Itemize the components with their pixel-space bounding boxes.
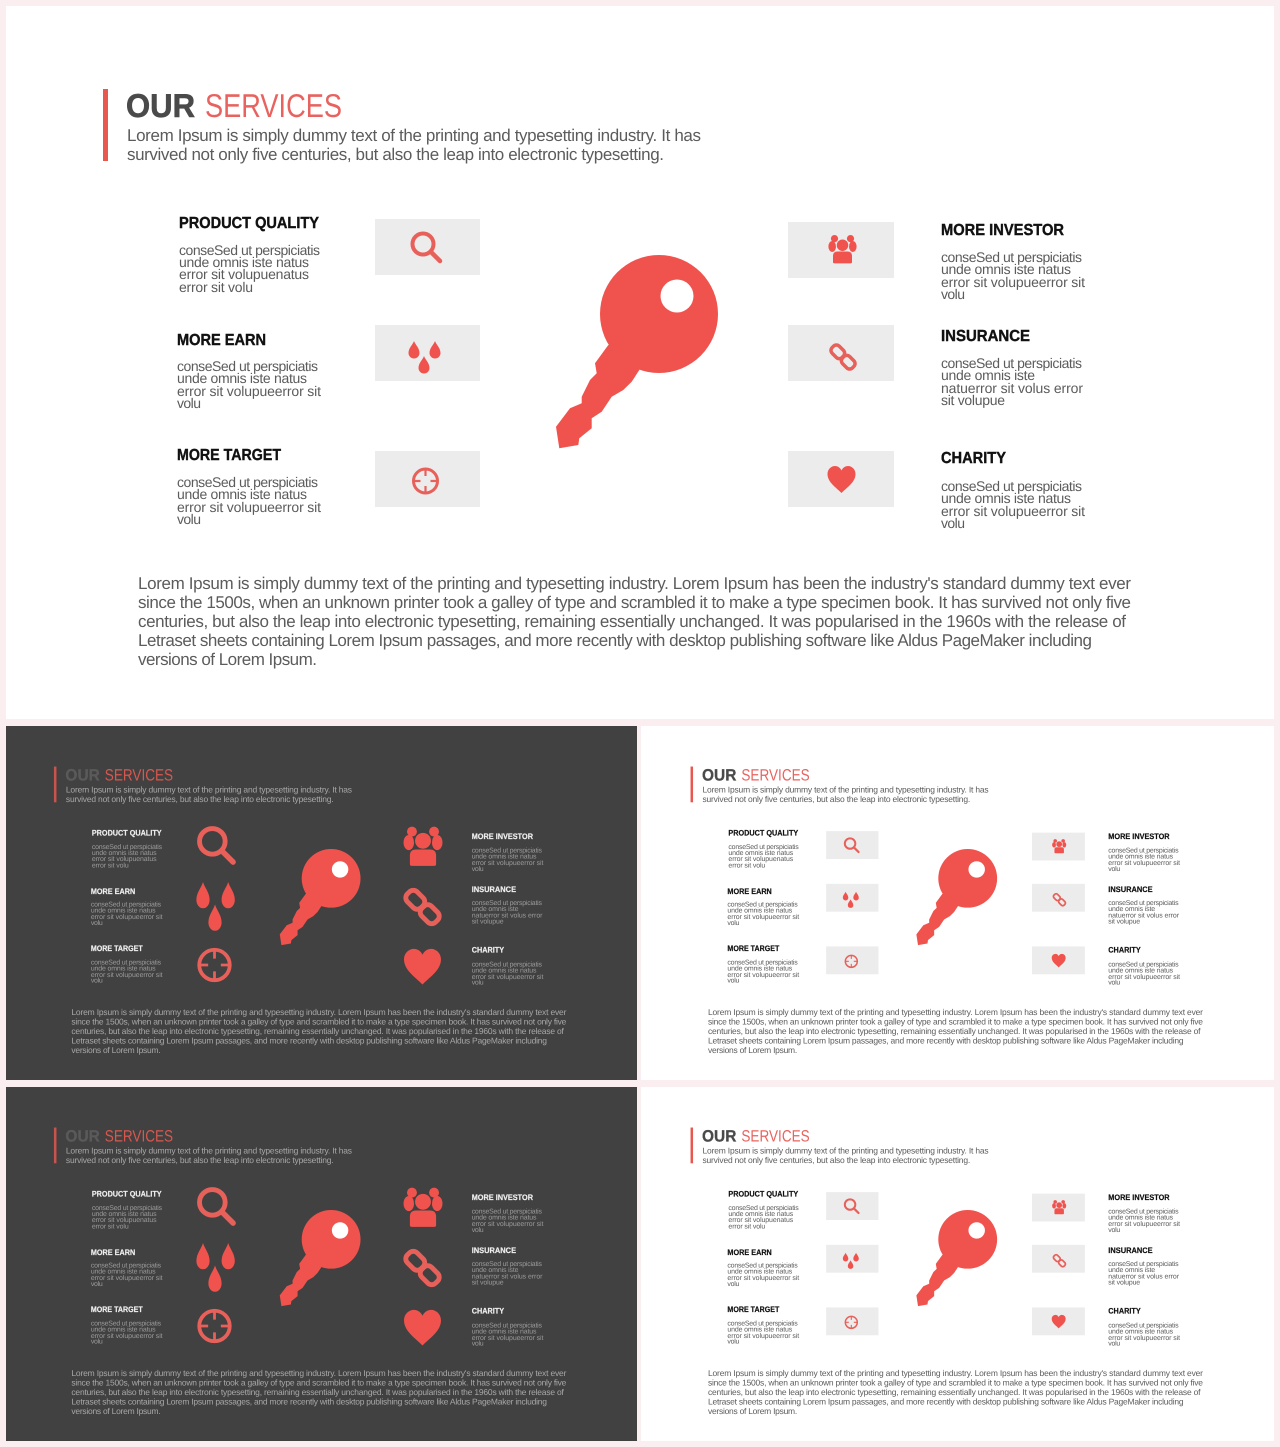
dark slide content: SERVICES (105, 766, 173, 784)
white slide content: unde omnis iste natus (727, 1325, 792, 1333)
dark slide content: Letraset sheets containing Lorem Ipsum passages, and more recently with desktop publishing software like Aldus PageMaker including (71, 1397, 547, 1406)
white slide content: SERVICES (741, 1127, 810, 1145)
white slide content: error sit volu (728, 1222, 765, 1230)
service: insurance: conseSed ut perspiciatis (941, 355, 1082, 371)
icon: people large (404, 1188, 442, 1227)
white slide content: volu (1108, 864, 1120, 872)
white slide content: conseSed ut perspiciatis (1108, 1207, 1179, 1215)
white slide content: since the 1500s, when an unknown printer took a galley of type and scrambled it to make a type specimen book. It has survived not only five (708, 1378, 1203, 1387)
icon: heart large (404, 1310, 441, 1345)
dark slide content: volu (91, 1337, 103, 1345)
dark slide content: survived not only five centuries, but also the leap into electronic typesetting. (66, 1155, 334, 1165)
icon box: target (375, 451, 480, 507)
dark slide content: MORE EARN (91, 1248, 135, 1257)
panel: dark slide bottom (6, 1087, 637, 1441)
white slide content: Lorem Ipsum is simply dummy text of the printing and typesetting industry. Lorem Ipsum has been the industry's standard dummy text ever (708, 1369, 1203, 1378)
subtitle: survived not only five centuries, but also the leap into electronic typesetting. (127, 145, 664, 164)
white slide content: MORE TARGET (727, 944, 779, 953)
white slide content: unde omnis iste natus (1108, 966, 1173, 974)
dark slide content: volu (472, 1339, 484, 1347)
service: product quality: error sit volupuenatus (179, 266, 309, 282)
white slide content: PRODUCT QUALITY (728, 1190, 798, 1199)
white slide content: since the 1500s, when an unknown printer took a galley of type and scrambled it to make a type specimen book. It has survived not only five (708, 1017, 1203, 1026)
white slide content: unde omnis iste (1108, 1266, 1155, 1274)
dark slide content: unde omnis iste natus (472, 852, 536, 860)
icon: heart large (404, 949, 441, 984)
service: product quality: error sit volu (179, 279, 253, 295)
icon box: magnifier (375, 219, 480, 275)
white slide content: versions of Lorem Ipsum. (708, 1045, 797, 1055)
white slide content: error sit volupueerror sit (1108, 1219, 1180, 1227)
icon: magnifier large (200, 1190, 233, 1223)
white slide content: volu (1108, 1339, 1120, 1347)
service: more target: conseSed ut perspiciatis (177, 474, 318, 490)
service: more target: unde omnis iste natus (177, 486, 307, 502)
white slide content: Letraset sheets containing Lorem Ipsum passages, and more recently with desktop publishing software like Aldus PageMaker including (708, 1036, 1184, 1045)
service: product quality: conseSed ut perspiciatis (179, 242, 320, 258)
dark slide content: unde omnis iste natus (91, 1325, 156, 1333)
white slide content: conseSed ut perspiciatis (727, 1319, 798, 1327)
service: more target: MORE TARGET (177, 447, 281, 464)
dark slide content: error sit volupueerror sit (472, 972, 544, 980)
dark slide content: sit volupue (472, 1278, 504, 1286)
accent bar (103, 89, 108, 161)
dark slide content: SERVICES (105, 1127, 173, 1145)
dark slide content: volu (472, 1225, 484, 1233)
title: SERVICES (205, 87, 342, 124)
service: more investor (941, 222, 1085, 302)
dark slide content: error sit volupueerror sit (91, 970, 163, 978)
icon: target large (199, 950, 230, 980)
dark slide content: MORE INVESTOR (472, 1194, 533, 1202)
icon: key (556, 255, 718, 448)
dark slide content: conseSed ut perspiciatis (91, 1261, 161, 1269)
service: insurance: INSURANCE (941, 328, 1030, 345)
white slide content (691, 766, 1203, 1055)
dark slide content: PRODUCT QUALITY (92, 1190, 162, 1199)
white slide content: unde omnis iste natus (1108, 852, 1173, 860)
white slide content: CHARITY (1108, 946, 1141, 954)
white slide content: MORE INVESTOR (1108, 1194, 1170, 1202)
dark slide content: conseSed ut perspiciatis (472, 1321, 542, 1329)
white slide content: volu (727, 1280, 739, 1288)
white slide content: volu (727, 919, 739, 927)
icon: target large (199, 1311, 230, 1341)
subtitle: Lorem Ipsum is simply dummy text of the printing and typesetting industry. It has (127, 126, 701, 145)
dark slide content: unde omnis iste natus (91, 964, 156, 972)
white slide content: Lorem Ipsum is simply dummy text of the printing and typesetting industry. Lorem Ipsum has been the industry's standard dummy text ever (708, 1008, 1203, 1017)
paragraph: since the 1500s, when an unknown printer took a galley of type and scrambled it to make a type specimen book. It has survived not only five (138, 593, 1131, 612)
service: more earn (177, 332, 321, 411)
white slide content: error sit volupuenatus (728, 1216, 793, 1223)
white slide content: conseSed ut perspiciatis (1108, 1321, 1179, 1329)
white slide content: OUR (702, 766, 736, 784)
white slide content: volu (727, 1337, 739, 1345)
dark slide content: MORE INVESTOR (472, 833, 533, 841)
service: insurance: unde omnis iste (941, 367, 1035, 383)
icon: chain large (403, 1249, 442, 1287)
dark slide content: unde omnis iste (472, 1266, 519, 1274)
white slide content: unde omnis iste natus (728, 849, 793, 856)
dark slide content: conseSed ut perspiciatis (91, 1319, 161, 1327)
icon: drops large (196, 882, 235, 931)
dark slide content: Lorem Ipsum is simply dummy text of the printing and typesetting industry. Lorem Ipsum has been the industry's standard dummy text ever (71, 1369, 567, 1378)
dark slide content: conseSed ut perspiciatis (472, 1207, 542, 1215)
dark slide content: sit volupue (472, 917, 504, 925)
dark slide content: centuries, but also the leap into electronic typesetting, remaining essentially unchanged. It was popularised in the 1960s with the release of (71, 1026, 564, 1036)
white slide content: INSURANCE (1108, 885, 1153, 894)
white slide content: conseSed ut perspiciatis (727, 1261, 798, 1269)
dark slide content: error sit volupueerror sit (472, 1333, 544, 1341)
dark slide content: Lorem Ipsum is simply dummy text of the printing and typesetting industry. It has (66, 785, 352, 794)
paragraph: versions of Lorem Ipsum. (138, 650, 317, 669)
dark slide content: centuries, but also the leap into electronic typesetting, remaining essentially unchanged. It was popularised in the 1960s with the release of (71, 1387, 564, 1397)
white slide content: volu (1108, 1225, 1120, 1233)
white slide content: survived not only five centuries, but also the leap into electronic typesetting. (703, 794, 970, 804)
service: charity (941, 450, 1085, 531)
white slide content: centuries, but also the leap into electronic typesetting, remaining essentially unchanged. It was popularised in the 1960s with the release of (708, 1387, 1201, 1397)
dark slide content: conseSed ut perspiciatis (472, 846, 542, 854)
white slide content: conseSed ut perspiciatis (728, 1204, 799, 1212)
service: insurance (941, 328, 1083, 408)
white slide content: Lorem Ipsum is simply dummy text of the printing and typesetting industry. It has (703, 785, 989, 794)
dark slide content: survived not only five centuries, but also the leap into electronic typesetting. (66, 794, 334, 804)
dark slide content: volu (91, 919, 103, 927)
dark slide content: since the 1500s, when an unknown printer took a galley of type and scrambled it to make a type specimen book. It has survived not only five (71, 1017, 566, 1026)
dark slide content: INSURANCE (472, 1246, 516, 1255)
white slide content: volu (1108, 978, 1120, 986)
white slide content: unde omnis iste natus (1108, 1327, 1173, 1335)
paragraph (138, 574, 1131, 669)
paragraph: Letraset sheets containing Lorem Ipsum passages, and more recently with desktop publishing software like Aldus PageMaker including (138, 631, 1092, 650)
dark slide content: natuerror sit volus error (472, 1272, 543, 1280)
dark slide content: error sit volu (92, 1222, 129, 1230)
paragraph: centuries, but also the leap into electronic typesetting, remaining essentially unchanged. It was popularised in the 1960s with the release of (138, 612, 1126, 631)
white slide content: unde omnis iste natus (727, 964, 792, 972)
dark slide content: error sit volupuenatus (92, 855, 157, 862)
service: charity: error sit volupueerror sit (941, 503, 1085, 519)
white slide content: versions of Lorem Ipsum. (708, 1406, 797, 1416)
dark slide content: natuerror sit volus error (472, 911, 543, 919)
dark slide content: MORE TARGET (91, 944, 143, 953)
service: more target: volu (177, 511, 201, 527)
white slide content: sit volupue (1108, 1278, 1140, 1286)
dark slide content: error sit volu (92, 861, 129, 869)
dark slide content: Letraset sheets containing Lorem Ipsum passages, and more recently with desktop publishing software like Aldus PageMaker including (71, 1036, 547, 1045)
service: charity: unde omnis iste natus (941, 490, 1071, 506)
dark slide content: OUR (65, 766, 100, 784)
white slide content: MORE INVESTOR (1108, 833, 1170, 841)
dark slide content: unde omnis iste natus (472, 1327, 536, 1335)
dark slide content: volu (91, 976, 103, 984)
white slide content: error sit volupueerror sit (1108, 858, 1180, 866)
dark slide content: conseSed ut perspiciatis (91, 958, 161, 966)
icon: drops large (196, 1243, 235, 1292)
dark slide content: error sit volupueerror sit (472, 858, 544, 866)
service: more earn: unde omnis iste natus (177, 370, 307, 386)
service: product quality: PRODUCT QUALITY (179, 215, 319, 232)
dark slide content: volu (472, 978, 484, 986)
white slide content: error sit volupuenatus (728, 855, 793, 862)
dark slide content (54, 1127, 567, 1416)
white slide content: Lorem Ipsum is simply dummy text of the printing and typesetting industry. It has (703, 1146, 989, 1155)
dark slide content: versions of Lorem Ipsum. (71, 1406, 161, 1416)
white slide content: sit volupue (1108, 917, 1140, 925)
service: more investor: MORE INVESTOR (941, 222, 1064, 239)
service: more investor: volu (941, 286, 965, 302)
white slide content: unde omnis iste natus (728, 1210, 793, 1217)
service: product quality (179, 215, 320, 295)
icon box: people (788, 222, 894, 278)
dark slide content: conseSed ut perspiciatis (472, 899, 542, 907)
white slide content: unde omnis iste natus (727, 1267, 792, 1275)
dark slide content: conseSed ut perspiciatis (91, 900, 161, 908)
dark slide content: unde omnis iste natus (91, 1267, 156, 1275)
dark slide content: conseSed ut perspiciatis (472, 960, 542, 968)
white slide content: SERVICES (741, 766, 810, 784)
service: more earn: MORE EARN (177, 332, 266, 349)
service: charity: CHARITY (941, 450, 1006, 467)
service: more investor: conseSed ut perspiciatis (941, 249, 1082, 265)
dark slide content: Lorem Ipsum is simply dummy text of the printing and typesetting industry. Lorem Ipsum has been the industry's standard dummy text ever (71, 1008, 567, 1017)
dark slide content: volu (91, 1280, 103, 1288)
white slide content: unde omnis iste natus (727, 906, 792, 914)
white slide content: volu (727, 976, 739, 984)
white slide content: conseSed ut perspiciatis (727, 958, 798, 966)
white slide content: PRODUCT QUALITY (728, 829, 798, 838)
dark slide content: error sit volupueerror sit (91, 1274, 163, 1282)
dark slide content: versions of Lorem Ipsum. (71, 1045, 161, 1055)
white slide content: error sit volupueerror sit (1108, 972, 1180, 980)
panel: white slide bottom (641, 1087, 1274, 1441)
white slide content: error sit volupueerror sit (727, 913, 799, 921)
white slide content: conseSed ut perspiciatis (1108, 846, 1179, 854)
dark slide content: volu (472, 864, 484, 872)
white slide content: conseSed ut perspiciatis (728, 843, 799, 851)
white slide content: conseSed ut perspiciatis (1108, 1260, 1179, 1268)
dark slide content: unde omnis iste (472, 905, 519, 913)
white slide content (691, 1127, 1203, 1416)
service: more earn: conseSed ut perspiciatis (177, 358, 318, 374)
dark slide content: since the 1500s, when an unknown printer took a galley of type and scrambled it to make a type specimen book. It has survived not only five (71, 1378, 566, 1387)
white slide content: conseSed ut perspiciatis (1108, 899, 1179, 907)
panel: dark slide top (6, 726, 637, 1080)
service: more earn: error sit volupueerror sit (177, 383, 321, 399)
dark slide content: Lorem Ipsum is simply dummy text of the printing and typesetting industry. It has (66, 1146, 352, 1155)
dark slide content: error sit volupueerror sit (472, 1219, 544, 1227)
dark slide content: unde omnis iste natus (472, 966, 536, 974)
white slide content: error sit volu (728, 861, 765, 869)
title: OUR (126, 87, 195, 124)
paragraph: Lorem Ipsum is simply dummy text of the printing and typesetting industry. Lorem Ipsum has been the industry's standard dummy text ever (138, 574, 1131, 593)
dark slide content: conseSed ut perspiciatis (92, 1204, 162, 1212)
service: more target (177, 447, 321, 527)
white slide content: INSURANCE (1108, 1246, 1153, 1255)
service: more investor: error sit volupueerror sit (941, 274, 1085, 290)
icon: magnifier large (200, 829, 233, 862)
dark slide content: unde omnis iste natus (91, 906, 156, 914)
dark slide content (54, 766, 567, 1055)
white slide content: survived not only five centuries, but also the leap into electronic typesetting. (703, 1155, 970, 1165)
white slide content: CHARITY (1108, 1307, 1141, 1315)
service: product quality: unde omnis iste natus (179, 254, 309, 270)
title (126, 87, 342, 124)
icon box: drops (375, 325, 480, 381)
service: insurance: sit volupue (941, 392, 1005, 408)
service: more earn: volu (177, 395, 201, 411)
white slide content: unde omnis iste natus (1108, 1213, 1173, 1221)
white slide content: MORE EARN (727, 1248, 772, 1257)
icon box: heart (788, 451, 894, 507)
dark slide content: PRODUCT QUALITY (92, 829, 162, 838)
white slide content: error sit volupueerror sit (727, 970, 799, 978)
white slide content: error sit volupueerror sit (1108, 1333, 1180, 1341)
dark slide content: INSURANCE (472, 885, 516, 894)
white slide content: Letraset sheets containing Lorem Ipsum passages, and more recently with desktop publishing software like Aldus PageMaker including (708, 1397, 1184, 1406)
panel: main white slide (6, 6, 1274, 719)
white slide content: conseSed ut perspiciatis (727, 900, 798, 908)
subtitle (127, 126, 701, 164)
white slide content: natuerror sit volus error (1108, 1272, 1179, 1280)
dark slide content: conseSed ut perspiciatis (472, 1260, 542, 1268)
service: insurance: natuerror sit volus error (941, 380, 1083, 396)
dark slide content: conseSed ut perspiciatis (92, 843, 162, 851)
white slide content: OUR (702, 1127, 736, 1145)
service: charity: conseSed ut perspiciatis (941, 478, 1082, 494)
dark slide content: error sit volupueerror sit (91, 1331, 163, 1339)
dark slide content: CHARITY (472, 1307, 504, 1315)
dark slide content: error sit volupuenatus (92, 1216, 157, 1223)
white slide content: unde omnis iste (1108, 905, 1155, 913)
dark slide content: MORE TARGET (91, 1305, 143, 1314)
white slide content: natuerror sit volus error (1108, 911, 1179, 919)
white slide content: error sit volupueerror sit (727, 1274, 799, 1282)
white slide content: conseSed ut perspiciatis (1108, 960, 1179, 968)
dark slide content: unde omnis iste natus (472, 1213, 536, 1221)
panel: white slide top (641, 726, 1274, 1080)
service: more target: error sit volupueerror sit (177, 499, 321, 515)
dark slide content: unde omnis iste natus (92, 849, 157, 856)
dark slide content: unde omnis iste natus (92, 1210, 157, 1217)
dark slide content: CHARITY (472, 946, 504, 954)
icon: chain large (403, 888, 442, 926)
white slide content: MORE EARN (727, 887, 772, 896)
icon box: chain (788, 325, 894, 381)
dark slide content: OUR (65, 1127, 100, 1145)
white slide content: error sit volupueerror sit (727, 1331, 799, 1339)
icon: people large (404, 827, 442, 866)
white slide content: centuries, but also the leap into electronic typesetting, remaining essentially unchanged. It was popularised in the 1960s with the release of (708, 1026, 1201, 1036)
dark slide content: MORE EARN (91, 887, 135, 896)
service: charity: volu (941, 515, 965, 531)
service: more investor: unde omnis iste natus (941, 261, 1071, 277)
white slide content: MORE TARGET (727, 1305, 779, 1314)
dark slide content: error sit volupueerror sit (91, 913, 163, 921)
